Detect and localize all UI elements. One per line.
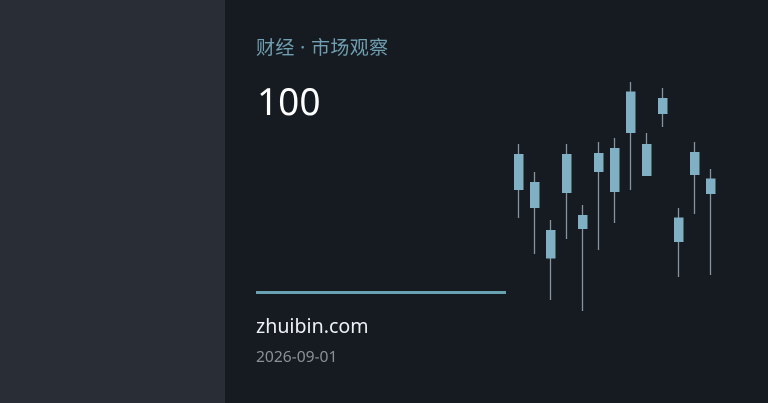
site name: zhuibin.com bbox=[256, 312, 369, 339]
title: 100: 100 bbox=[257, 75, 320, 126]
accent rule bbox=[256, 291, 506, 294]
heading: category label: 财经 · 市场观察 bbox=[256, 34, 389, 60]
panel: left sidebar bbox=[0, 0, 225, 403]
date: 2026-09-01 bbox=[256, 345, 337, 367]
